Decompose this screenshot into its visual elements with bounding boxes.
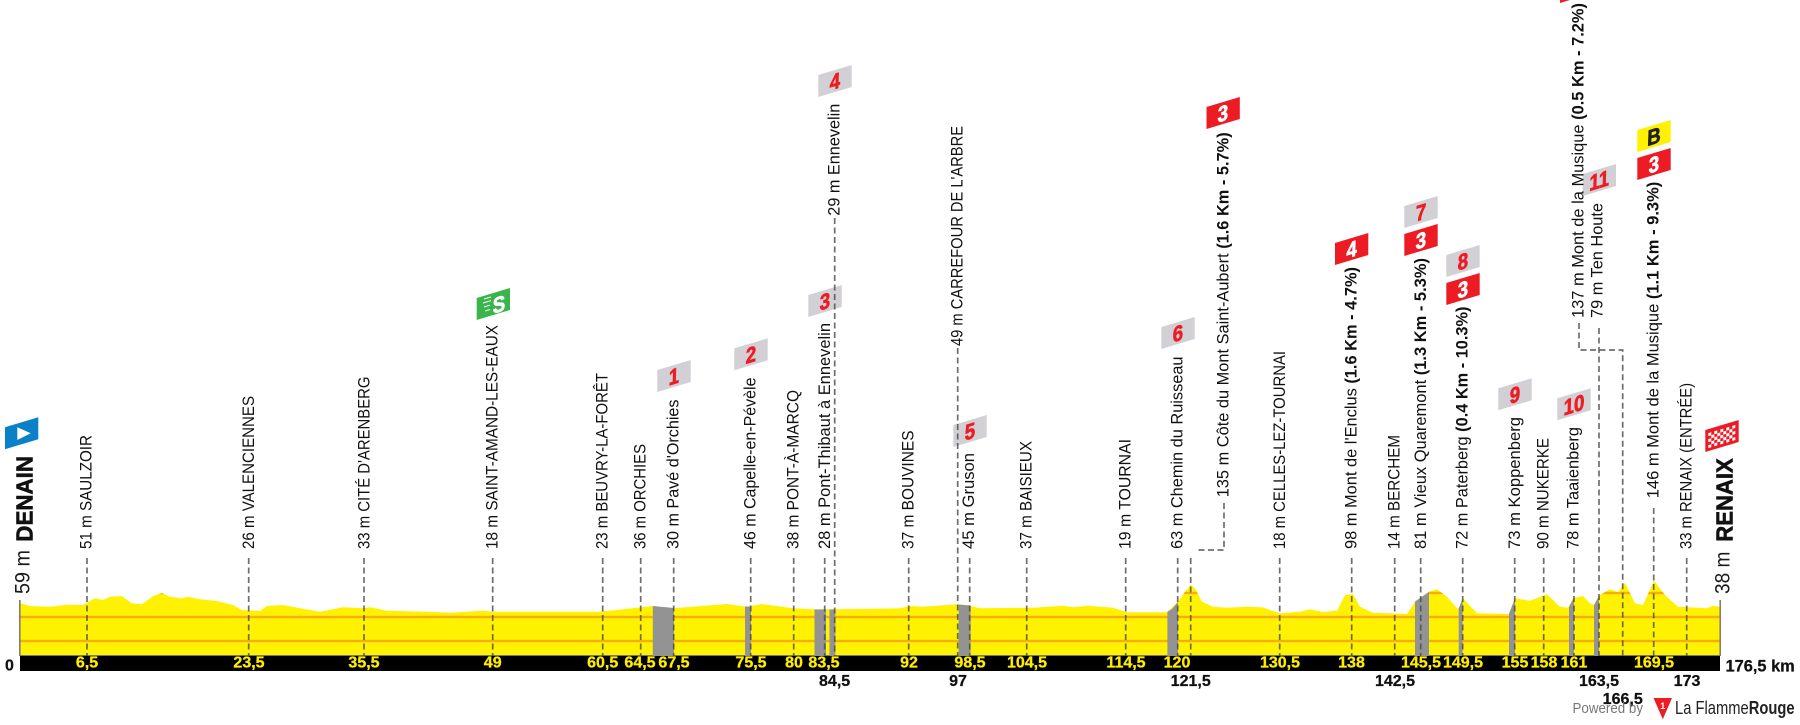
marker: Cité d'Arenberg: 33 m CITÉ D'ARENBERG bbox=[354, 376, 373, 549]
marker: Mont de la Musique first passage: 137 m Mont de la Musique (0.5 Km - 7.2%) bbox=[1568, 3, 1587, 318]
flag: start bbox=[5, 417, 38, 449]
flag: sector 2: 2 bbox=[745, 342, 757, 369]
lower kilometre marks bbox=[5, 658, 1795, 708]
marker: Renaix entrée: 33 m RENAIX (ENTRÉE) bbox=[1677, 383, 1696, 549]
marker: Gruson: 45 m Gruson bbox=[959, 453, 978, 549]
marker: Pont-à-Marcq: 38 m PONT-À-MARCQ bbox=[784, 390, 803, 549]
kilometre bar: 161 bbox=[1561, 654, 1587, 672]
flag: sector 4 bbox=[818, 65, 852, 97]
kilometre bar: 169,5 bbox=[1634, 654, 1674, 672]
flag: sector 11 bbox=[1583, 164, 1616, 196]
kilometre bar: 120 bbox=[1164, 654, 1190, 672]
flag: sector 3 bbox=[808, 285, 842, 317]
marker: Carrefour de l'Arbre: 49 m CARREFOUR DE L'ARBRE bbox=[948, 126, 967, 346]
marker: Chemin du Ruisseau: 63 m Chemin du Ruisseau bbox=[1168, 356, 1187, 549]
flag: sector 5: 5 bbox=[964, 418, 976, 446]
flags: sector 7 and climb 3: 3 bbox=[1415, 227, 1427, 255]
marker: Côte du Mont Saint-Aubert: 135 m Côte du Mont Saint-Aubert (1.6 Km - 5.7%) bbox=[1213, 132, 1232, 497]
logo: La Flamme Rouge bbox=[1572, 698, 1795, 719]
marker: Mont de l'Enclus: 98 m Mont de l'Enclus (1.6 Km - 4.7%) bbox=[1342, 267, 1361, 549]
lower kilometre marks: 173 bbox=[1674, 673, 1700, 690]
marker: Taaienberg: 78 m Taaienberg bbox=[1563, 427, 1582, 549]
start label: Denain: 59 m bbox=[11, 550, 34, 594]
marker: Nukerke: 90 m NUKERKE bbox=[1534, 438, 1553, 549]
flags: sector 8 and climb 3: 8 bbox=[1457, 248, 1469, 276]
cobbled sectors bbox=[653, 592, 1599, 656]
flag: sprint bbox=[477, 288, 510, 320]
elevation profile bbox=[19, 575, 1721, 656]
kilometre bar: 145,5 bbox=[1401, 654, 1441, 672]
marker: Bouvines: 37 m BOUVINES bbox=[899, 430, 918, 549]
flag: sector 2 bbox=[734, 338, 768, 370]
flag: finish chequered bbox=[1705, 420, 1739, 452]
kilometre bar: 75,5 bbox=[735, 654, 767, 672]
kilometre bar: 98,5 bbox=[954, 654, 986, 672]
flag: cropped climb marker bbox=[1560, 0, 1593, 3]
kilometre bar: 23,5 bbox=[233, 654, 265, 672]
flag: sprint: S bbox=[493, 291, 505, 319]
marker: Ten Houte: 79 m Ten Houte bbox=[1588, 203, 1607, 318]
kilometre bar: 155 bbox=[1502, 654, 1528, 672]
marker: Mont de la Musique second passage: 146 m Mont de la Musique (1.1 Km - 9.3%) bbox=[1643, 182, 1662, 498]
kilometre bar: 104,5 bbox=[1007, 654, 1047, 672]
lower kilometre marks: 166,5 bbox=[1603, 691, 1643, 708]
kilometre bar: 130,5 bbox=[1260, 654, 1300, 672]
finish label: Renaix: RENAIX bbox=[1712, 458, 1738, 542]
marker: Saint-Amand-les-Eaux: 18 m SAINT-AMAND-LES-EAUX bbox=[483, 325, 502, 549]
logo: La Flamme Rouge: Powered by bbox=[1572, 700, 1643, 717]
flag: sector 1 bbox=[657, 360, 691, 392]
flags: bonus and climb 3: 3 bbox=[1648, 151, 1660, 179]
kilometre bar: 49 bbox=[484, 654, 502, 672]
flags: sector 8 and climb 3: 3 bbox=[1457, 276, 1469, 304]
marker: Mont de la Musique first passage bbox=[1568, 3, 1623, 656]
lower kilometre marks: 176,5 km bbox=[1726, 658, 1795, 676]
flag: sector 4: 4 bbox=[829, 68, 841, 96]
lower kilometre marks: 0 bbox=[5, 658, 14, 675]
finish label: Renaix bbox=[1711, 458, 1738, 594]
kilometre bar: 64,5 bbox=[624, 654, 656, 672]
kilometre bar: 114,5 bbox=[1106, 654, 1146, 672]
marker: Berchem: 14 m BERCHEM bbox=[1384, 435, 1403, 549]
flag: climb category 4 Enclus bbox=[1335, 233, 1368, 265]
flag: climb category 3 Saint-Aubert: 3 bbox=[1217, 100, 1229, 128]
flag: sector 3: 3 bbox=[819, 288, 831, 316]
marker: Orchies: 36 m ORCHIES bbox=[631, 444, 650, 549]
flag: sector 9 bbox=[1498, 378, 1532, 410]
flags: sector 7 and climb 3: 7 bbox=[1415, 199, 1427, 227]
lower kilometre marks: 163,5 bbox=[1579, 673, 1619, 690]
kilometre bar: 83,5 bbox=[808, 654, 840, 672]
kilometre bar bbox=[20, 654, 1720, 672]
marker: Pont-Thibaut à Ennevelin: 28 m Pont-Thibaut à Ennevelin bbox=[815, 323, 834, 549]
lower kilometre marks: 97 bbox=[949, 673, 967, 690]
kilometre bar: 92 bbox=[900, 654, 918, 672]
marker: Beuvry-la-Forêt: 23 m BEUVRY-LA-FORÊT bbox=[593, 373, 612, 549]
kilometre bar: 138 bbox=[1338, 654, 1365, 672]
marker: Valenciennes: 26 m VALENCIENNES bbox=[239, 396, 258, 549]
flags: sector 7 and climb 3 bbox=[1404, 196, 1438, 256]
start label: Denain: DENAIN bbox=[12, 456, 38, 542]
flag: sector 9: 9 bbox=[1509, 382, 1521, 409]
marker: Côte du Mont Saint-Aubert bbox=[1191, 132, 1232, 656]
lower kilometre marks: 121,5 bbox=[1171, 673, 1211, 690]
flags: bonus and climb 3: B bbox=[1647, 123, 1661, 151]
marker: Paterberg: 72 m Paterberg (0.4 Km - 10.3%) bbox=[1453, 306, 1472, 549]
marker: Pavé d'Orchies: 30 m Pavé d'Orchies bbox=[664, 400, 683, 549]
marker: Ennevelin: 29 m Ennevelin bbox=[824, 104, 843, 216]
marker: Vieux Quaremont: 81 m Vieux Quaremont (1.3 Km - 5.3%) bbox=[1411, 258, 1430, 549]
kilometre bar: 149,5 bbox=[1443, 654, 1483, 672]
flag: sector 1: 1 bbox=[668, 363, 680, 391]
marker: Tournai: 19 m TOURNAI bbox=[1116, 439, 1135, 549]
lower kilometre marks: 84,5 bbox=[819, 673, 850, 690]
flag: sector 11: 11 bbox=[1589, 166, 1610, 196]
marker: Saulzoir: 51 m SAULZOIR bbox=[77, 435, 96, 549]
flag: sector 10 bbox=[1557, 388, 1591, 421]
flag: sector 10: 10 bbox=[1563, 390, 1585, 421]
flag: climb category 3 Saint-Aubert bbox=[1206, 97, 1240, 129]
marker: Celles-lez-Tournai: 18 m CELLES-LEZ-TOURNAI bbox=[1270, 351, 1289, 549]
start label: Denain bbox=[11, 456, 38, 594]
logo: La Flamme Rouge: 1 bbox=[1660, 701, 1665, 711]
flags: sector 8 and climb 3 bbox=[1446, 245, 1480, 305]
kilometre bar: 80 bbox=[785, 654, 803, 672]
flag: climb category 4 Enclus: 4 bbox=[1346, 236, 1358, 264]
kilometre bar: 158 bbox=[1531, 654, 1557, 672]
flag: sector 6: 6 bbox=[1172, 320, 1184, 348]
kilometre bar: 6,5 bbox=[76, 654, 98, 672]
finish label: Renaix: 38 m bbox=[1711, 552, 1734, 594]
marker: Koppenberg: 73 m Koppenberg bbox=[1505, 417, 1524, 549]
flags: bonus and climb 3 bbox=[1637, 120, 1671, 180]
kilometre bar: 35,5 bbox=[348, 654, 380, 672]
kilometre bar: 60,5 bbox=[587, 654, 618, 672]
marker: Capelle-en-Pévèle: 46 m Capelle-en-Pévèle bbox=[741, 378, 760, 549]
kilometre bar: 67,5 bbox=[658, 654, 690, 672]
flag: sector 5 bbox=[953, 415, 987, 447]
marker: Baisieux: 37 m BAISIEUX bbox=[1017, 441, 1036, 549]
flag: sector 6 bbox=[1161, 317, 1195, 349]
lower kilometre marks: 142,5 bbox=[1375, 673, 1415, 690]
